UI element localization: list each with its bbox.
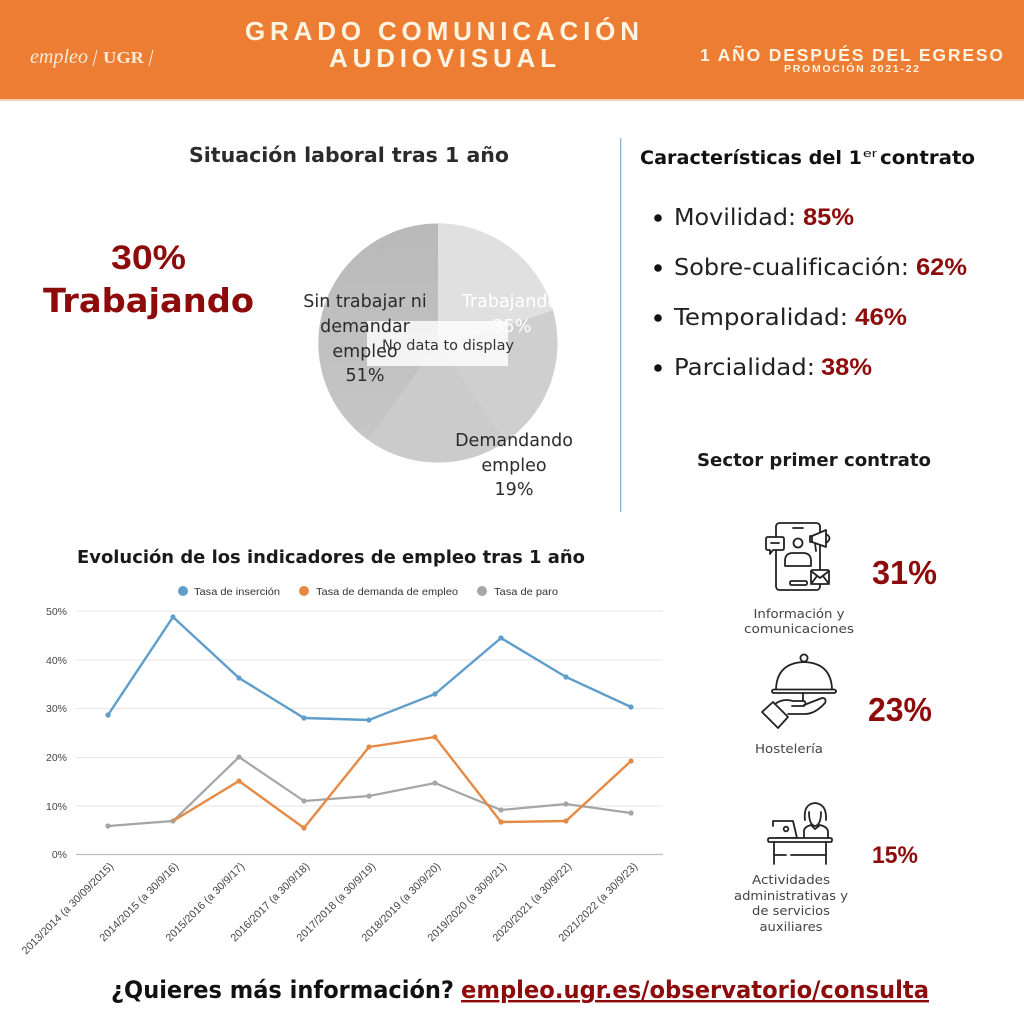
logo: empleo UGR [30,46,153,68]
legend: Tasa de paro [494,586,558,598]
icon: phone with messages [766,523,830,590]
legend: Tasa de demanda de empleo [316,586,458,598]
footer link: empleo.ugr.es/observatorio/consulta [461,976,929,1004]
icon: cloche on hand [762,654,836,728]
heading: sector primer contrato: Sector primer contrato [697,451,931,471]
x axis labels: 2015/2016 (a 30/9/17) [163,861,247,944]
list: contract characteristics: Temporalidad: [673,305,848,331]
heading: características [640,147,975,169]
x axis labels: 2017/2018 (a 30/9/19) [294,861,378,944]
pie label: sin trabajar: 51% [346,366,384,386]
subtitle: class year: PROMOCIÓN 2021-22 [784,62,919,75]
label: información: Información y [754,606,845,621]
callout: 30% trabajando [43,239,254,320]
callout: 30% trabajando: 30% [111,239,186,277]
y axis labels: 10% [46,801,67,813]
footer call to action: ¿Quieres más información? [111,976,454,1004]
pie chart [303,223,573,500]
series: tasa de paro [105,754,634,829]
label: actividades: administrativas y [734,888,849,903]
heading: situación laboral: Situación laboral tras 1 año [189,143,509,167]
list: contract characteristics [654,204,967,381]
no data box [367,321,508,366]
subtitle: time after graduation: 1 AÑO DESPUÉS DEL EGRESO [700,44,1003,65]
x axis labels: 2014/2015 (a 30/9/16) [97,861,181,944]
pie label: trabajando: Trabajando [461,292,558,312]
heading: evolución: Evolución de los indicadores de empleo tras 1 año [77,547,585,568]
heading: características: contrato [880,147,975,169]
x axis labels: 2016/2017 (a 30/9/18) [228,861,312,944]
title: GRADO COMUNICACIÓN [245,16,639,46]
pie label: trabajando: 35% [493,317,531,337]
label: hostelería: Hostelería [755,741,823,756]
percent: hostelería: 23% [868,691,932,728]
x axis labels: 2013/2014 (a 30/09/2015) [20,861,116,957]
list: contract characteristics: 38% [821,354,872,381]
percent: actividades: 15% [872,842,918,869]
heading: características: Características del 1 [640,147,862,169]
pie label: sin trabajar: empleo [332,342,398,362]
logo: empleo UGR: empleo [30,46,88,68]
y axis labels: 50% [46,606,67,618]
x axis labels: 2020/2021 (a 30/9/22) [490,861,574,944]
x axis labels: 2019/2020 (a 30/9/21) [425,861,509,944]
line chart [20,586,663,957]
y axis labels [46,606,67,861]
legend: Tasa de inserción [194,586,280,598]
y axis labels: 20% [46,752,67,764]
label: información: comunicaciones [744,621,854,636]
series: tasa de inserción [105,614,634,723]
label: actividades: auxiliares [760,919,822,934]
list: contract characteristics: Parcialidad: [674,355,815,381]
x axis labels: 2018/2019 (a 30/9/20) [359,861,443,944]
list: contract characteristics: 62% [916,254,967,281]
legend [178,586,558,598]
pie label: demandando: Demandando [455,431,573,451]
footer call to action [111,976,929,1004]
pie label: sin trabajar: demandar [320,317,411,337]
list: contract characteristics: 85% [803,204,854,231]
title: AUDIOVISUAL [329,43,556,73]
x axis labels [20,861,640,957]
label: actividades: de servicios [752,903,830,918]
title [245,16,639,73]
header banner [0,0,1024,101]
pie label: demandando: 19% [495,480,533,500]
callout: 30% trabajando: Trabajando [43,281,254,320]
label: actividades: Actividades [752,872,830,887]
icon: office worker at desk [768,803,832,864]
list: contract characteristics: 46% [855,304,907,331]
series: tasa de demanda [173,734,634,831]
pie label: demandando: empleo [481,456,547,476]
percent: información: 31% [872,554,937,591]
x axis labels: 2021/2022 (a 30/9/23) [556,861,640,944]
heading: características: er [863,148,877,160]
no data text: No data to display [382,338,514,354]
list: contract characteristics: Sobre-cualificación: [674,255,909,281]
y axis labels: 0% [52,849,67,861]
list: contract characteristics: Movilidad: [674,205,796,231]
y axis labels: 40% [46,655,67,667]
pie label: sin trabajar: Sin trabajar ni [303,292,427,312]
y axis labels: 30% [46,703,67,715]
logo: empleo UGR: UGR [103,48,145,67]
